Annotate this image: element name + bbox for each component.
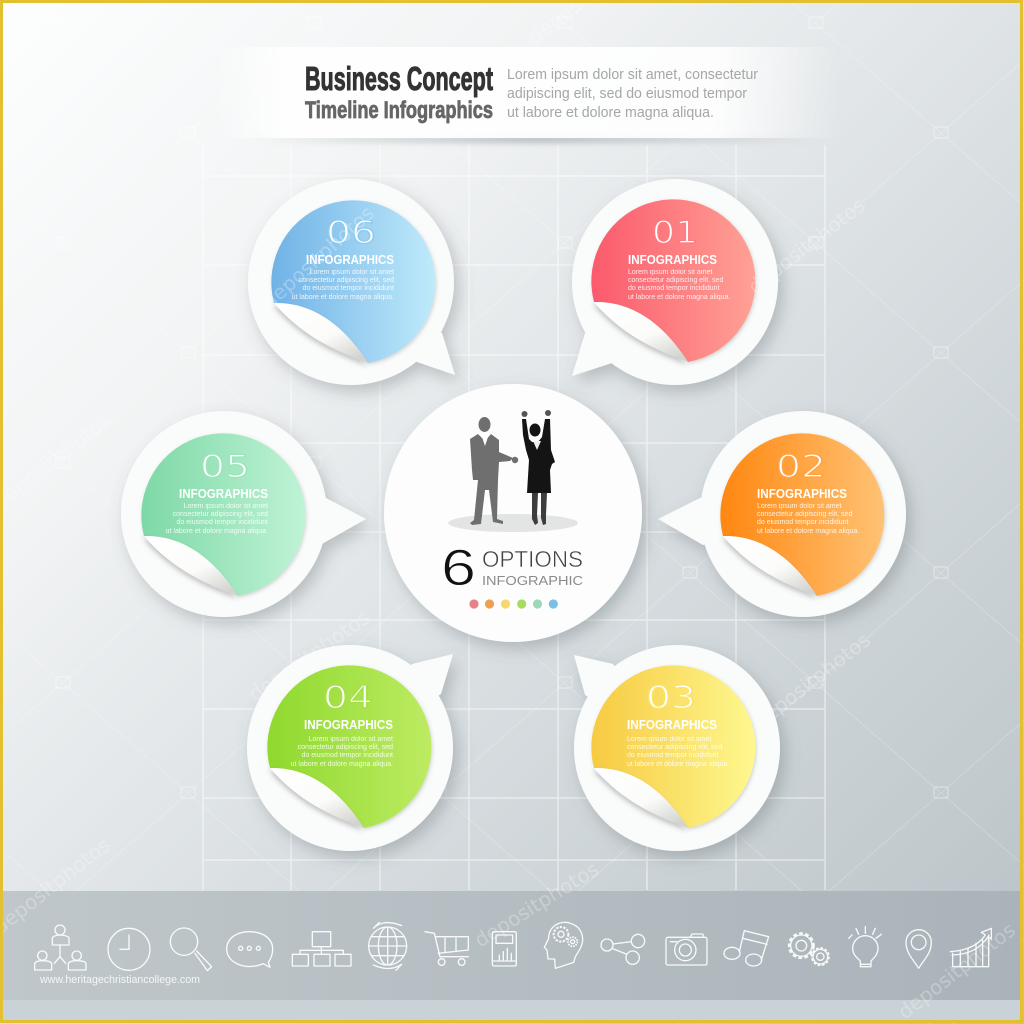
panel: centre circle (384, 384, 642, 642)
icon: speech bubble (227, 932, 273, 967)
panel: option 05: 05 (200, 449, 250, 485)
header description: Lorem ipsum dolor sit amet, consectetur (507, 67, 758, 83)
panel: option 01 (572, 179, 778, 385)
panel: option 04: 04 (323, 680, 373, 716)
header description: ut labore et dolore magna aliqua. (507, 105, 714, 121)
watermark text: depositphotos (748, 628, 875, 734)
panel: option 04: Lorem ipsum dolor sit amet (309, 736, 393, 743)
icon: clock (108, 928, 150, 970)
panel: option 02: Lorem ipsum dolor sit amet (757, 503, 841, 510)
panel: option 03: Lorem ipsum dolor sit amet (627, 736, 711, 743)
watermark text: deposit (0, 14, 72, 80)
icon row (35, 922, 991, 971)
panel: option 06: 06 (326, 215, 376, 251)
panel: option 04: ut labore et dolore magna aliqua. (291, 761, 393, 768)
icon: org chart (292, 932, 351, 966)
panel: option 04: consectetur adipiscing elit, sed (298, 744, 393, 751)
panel: option 01: do eiusmod tempor incididunt (628, 285, 719, 292)
panel: option 02: do eiusmod tempor incididunt (757, 519, 848, 526)
panel: option 03: INFOGRAPHICS (627, 718, 717, 732)
icon: magnifier (170, 928, 212, 971)
title (305, 60, 493, 124)
icon: team (35, 925, 86, 970)
panel: option 02 (658, 411, 906, 617)
panel: option 06: do eiusmod tempor incididunt (303, 285, 394, 292)
panel: option 03: do eiusmod tempor incididunt (627, 752, 718, 759)
colour dots (469, 599, 558, 609)
panel: option 05: INFOGRAPHICS (179, 487, 268, 501)
panel: option 04: do eiusmod tempor incididunt (302, 752, 393, 759)
panel: option 05: consectetur adipiscing elit, sed (173, 511, 268, 518)
panel: option 05: ut labore et dolore magna aliqua. (166, 528, 268, 535)
icon: location pin (906, 930, 931, 968)
panel: option 06: ut labore et dolore magna aliqua. (292, 294, 394, 301)
icon: tablet (492, 932, 516, 966)
panel: option 04 (247, 645, 453, 851)
header banner (215, 47, 840, 143)
panel: option 03: 03 (646, 680, 696, 716)
panel: option 01: ut labore et dolore magna aliqua. (628, 294, 730, 301)
icon: light bulb (849, 927, 881, 967)
watermark text: depositphotos (470, 857, 603, 952)
header description: adipiscing elit, sed do eiusmod tempor (507, 86, 747, 102)
panel: option 01: consectetur adipiscing elit, sed (628, 277, 723, 284)
watermark text: depositphotos (743, 193, 870, 299)
panel: option 05: Lorem ipsum dolor sit amet (184, 503, 268, 510)
infographic label: INFOGRAPHIC (482, 574, 583, 588)
icon: head with gears (544, 922, 583, 968)
bottom icon band (3, 891, 1021, 1021)
panel: option 06: Lorem ipsum dolor sit amet (310, 269, 394, 276)
icon: camera (666, 934, 707, 965)
watermark text: depositphotos (257, 201, 379, 314)
icon: share (601, 934, 645, 964)
icon: music notes (724, 931, 769, 966)
panel: option 03: consectetur adipiscing elit, sed (627, 744, 722, 751)
panel: option 02: consectetur adipiscing elit, sed (757, 511, 852, 518)
panel: option 03 (574, 645, 780, 851)
watermark text: depositphotos (893, 918, 1020, 1024)
panel: option 01: INFOGRAPHICS (628, 253, 717, 267)
panel: option 04: INFOGRAPHICS (304, 718, 393, 732)
floor shadow ellipse (448, 514, 578, 532)
header description (507, 67, 758, 121)
icon: shopping cart (425, 932, 468, 965)
panel: option 06 (248, 179, 455, 385)
panel: option 05: do eiusmod tempor incididunt (177, 519, 268, 526)
panel: option 02: INFOGRAPHICS (757, 487, 847, 501)
icon: globe (369, 922, 407, 970)
big numeral 6: 6 (441, 539, 476, 596)
panel: option 03: ut labore et dolore magna aliqua. (627, 761, 729, 768)
panel: option 06: consectetur adipiscing elit, sed (299, 277, 394, 284)
icon: businessman (470, 417, 518, 525)
website url: www.heritagechristiancollege.com (39, 974, 200, 986)
icon: growth chart (950, 928, 991, 967)
title: Business Concept (305, 60, 493, 97)
panel: option 06: INFOGRAPHICS (306, 253, 394, 267)
panel: option 02: ut labore et dolore magna aliqua. (757, 528, 859, 535)
panel: option 01: 01 (652, 215, 698, 251)
watermark text: depositphotos (244, 605, 374, 706)
panel: option 01: Lorem ipsum dolor sit amet (628, 269, 712, 276)
title: Timeline Infographics (305, 97, 493, 124)
panel: option 02: 02 (776, 449, 826, 485)
icon: businesswoman (522, 410, 555, 525)
icon: gears (789, 934, 829, 965)
options label: OPTIONS (482, 546, 583, 572)
panel: option 05 (121, 411, 366, 617)
